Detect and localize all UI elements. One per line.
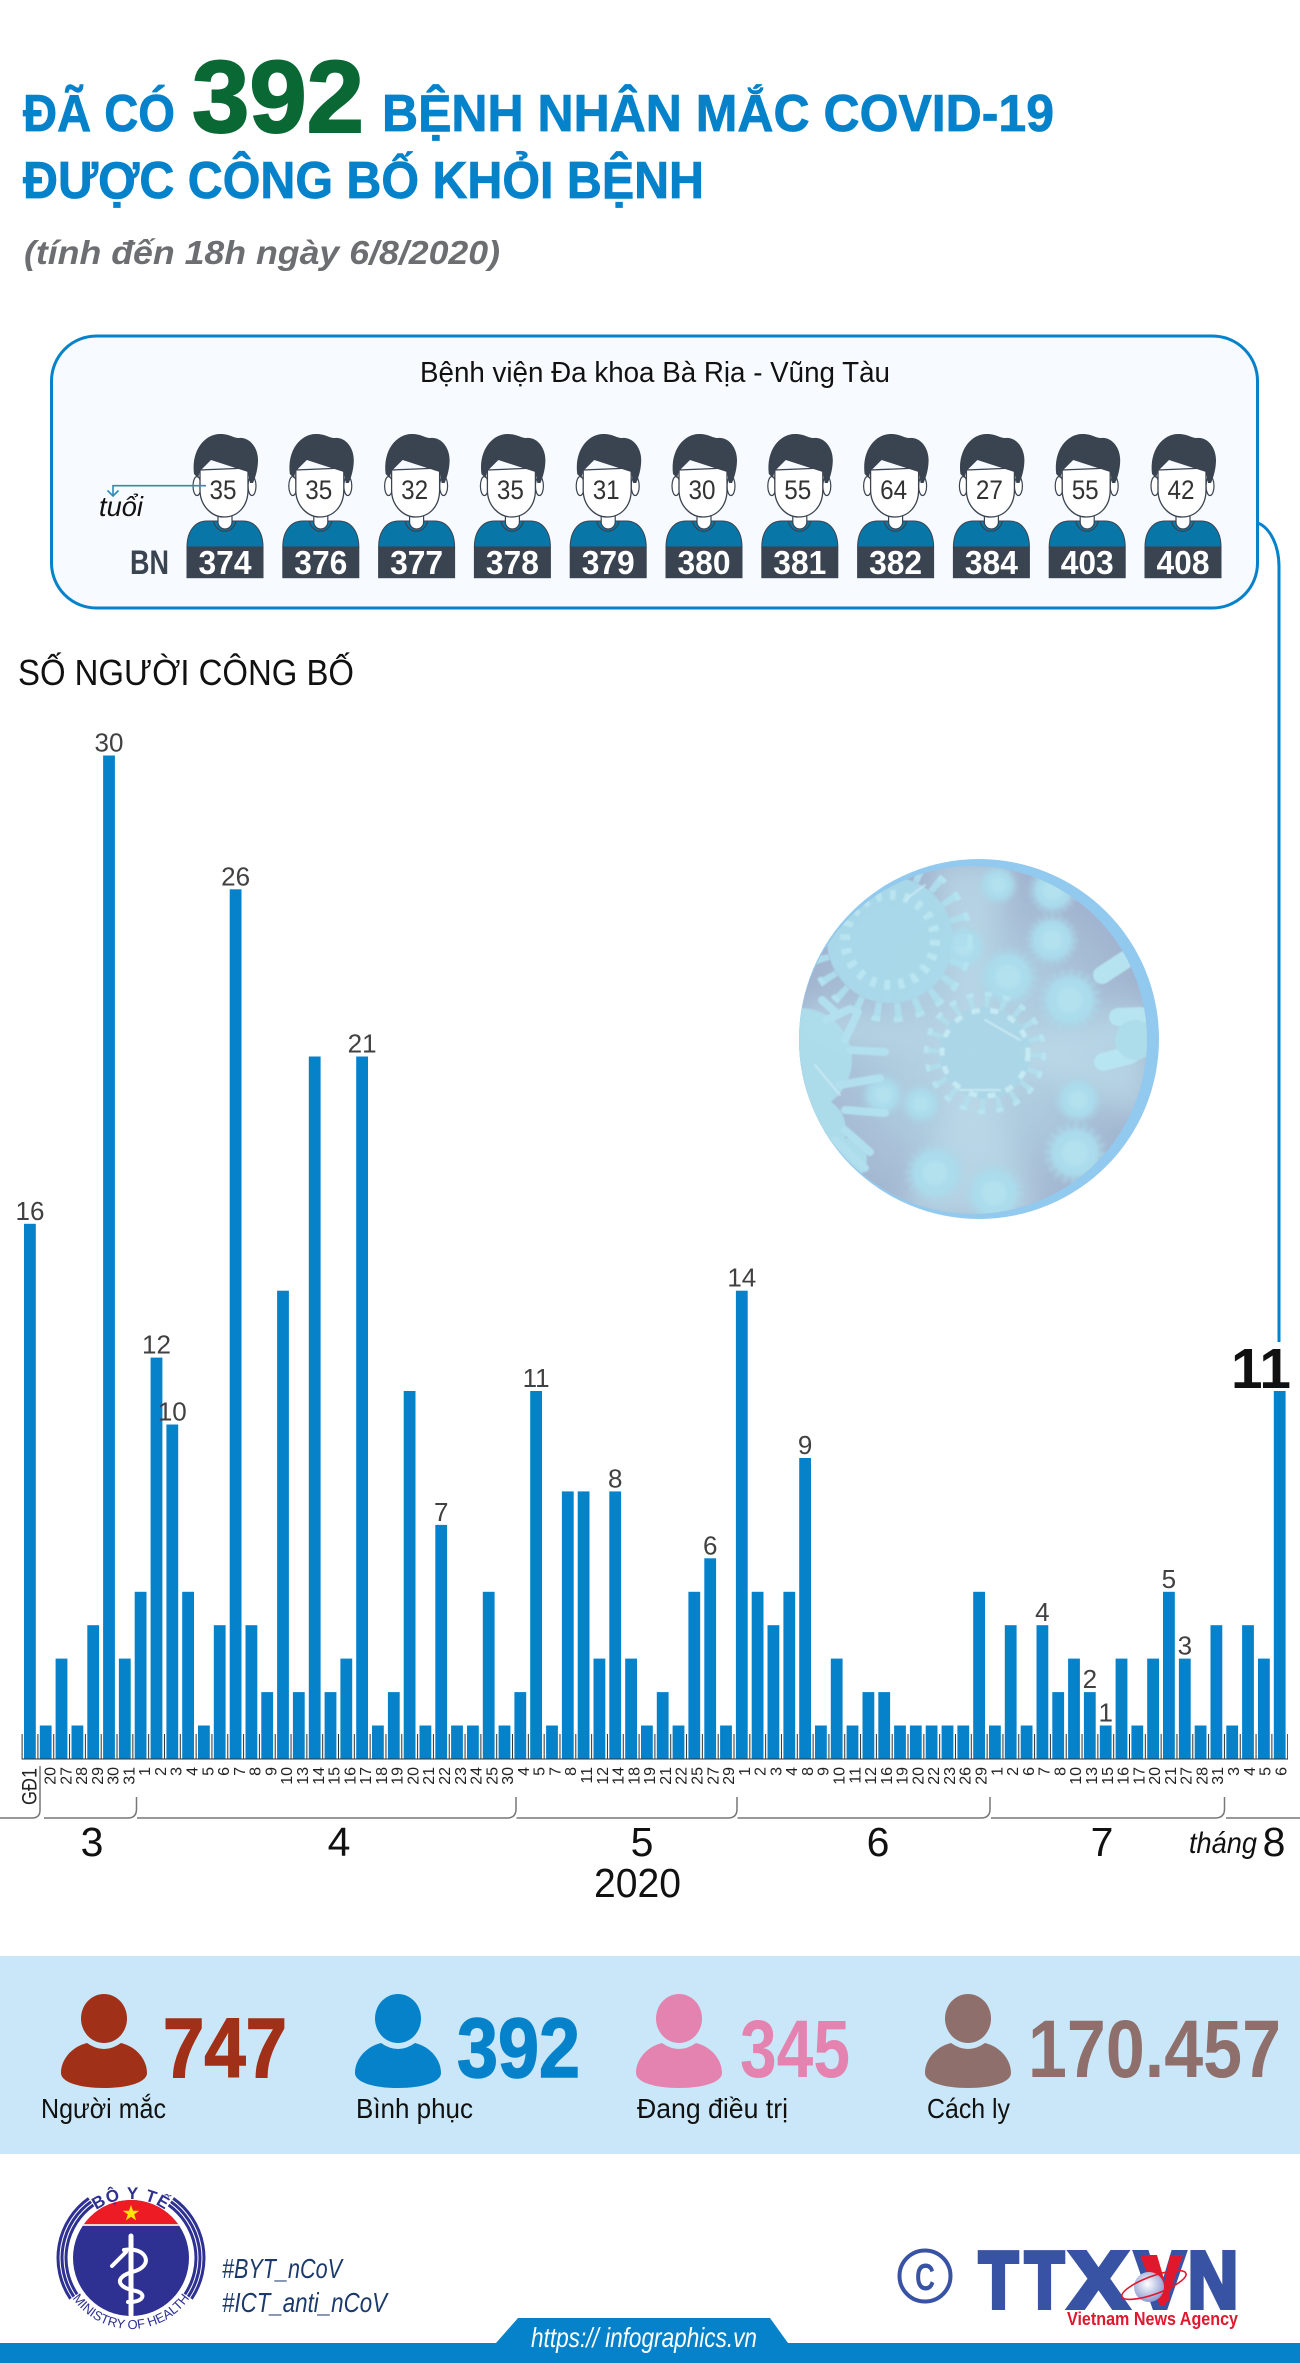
patient 408: 408 xyxy=(1156,544,1210,581)
date labels: 19 xyxy=(390,1767,407,1785)
date labels: 8 xyxy=(248,1767,265,1776)
date labels: 3 xyxy=(169,1767,186,1776)
patient 374: 35 xyxy=(210,475,236,505)
copyright mark xyxy=(900,2250,950,2302)
date labels: 22 xyxy=(437,1767,454,1785)
date labels: 11 xyxy=(847,1767,864,1784)
staff and snake xyxy=(112,2236,146,2315)
date labels: 7 xyxy=(548,1767,564,1776)
globe orbit xyxy=(1119,2265,1189,2305)
label: tuổi: tuổi xyxy=(99,491,144,522)
date labels: 7 xyxy=(1037,1767,1054,1776)
date labels: 15 xyxy=(326,1767,344,1785)
patient 382: 382 xyxy=(869,544,922,581)
date labels: 11 xyxy=(579,1767,596,1784)
illustration: coronavirus circle xyxy=(799,859,1159,1219)
date labels: 1 xyxy=(737,1767,754,1776)
date labels: 22 xyxy=(926,1767,943,1785)
patient 384 xyxy=(953,434,1030,581)
bar value labels: 7 xyxy=(434,1497,448,1527)
patient 380 xyxy=(666,434,742,581)
stat: bình phục: 392 xyxy=(457,2001,580,2095)
date labels: 23 xyxy=(942,1767,959,1785)
date labels: 6 xyxy=(1021,1767,1038,1776)
month brackets xyxy=(0,1766,1300,1818)
date labels: 27 xyxy=(705,1767,722,1785)
side arcs xyxy=(58,2198,204,2299)
date labels: 3 xyxy=(768,1767,785,1776)
date labels: 7 xyxy=(232,1767,249,1776)
band background xyxy=(0,1956,1300,2154)
date labels: 4 xyxy=(184,1767,202,1776)
axis line and ticks xyxy=(22,1758,1288,1760)
patient 403: 403 xyxy=(1061,544,1114,581)
date labels: 16 xyxy=(1116,1767,1132,1785)
bar value labels: 16 xyxy=(16,1196,44,1226)
date labels: 10 xyxy=(279,1767,296,1785)
patient 384: 27 xyxy=(976,475,1003,505)
date labels: 21 xyxy=(421,1767,438,1785)
bar value labels: 26 xyxy=(221,861,250,891)
patient 378: 378 xyxy=(486,544,539,581)
bar value labels: 12 xyxy=(142,1330,171,1360)
bar value labels: 8 xyxy=(608,1463,622,1493)
patient 384: 384 xyxy=(965,544,1019,581)
connector line from card to last bar xyxy=(1258,523,1279,1342)
patient 381: 381 xyxy=(773,544,826,581)
date labels: 27 xyxy=(58,1767,75,1785)
stat: đang điều trị: Đang điều trị xyxy=(637,2093,788,2124)
date labels: 10 xyxy=(1068,1767,1085,1785)
star xyxy=(123,2205,139,2220)
date labels: 29 xyxy=(974,1767,990,1785)
date labels: 19 xyxy=(895,1767,912,1785)
patient 403: 55 xyxy=(1072,475,1099,505)
date labels: 1 xyxy=(989,1767,1006,1776)
date labels: 17 xyxy=(358,1767,375,1785)
date labels: 3 xyxy=(1226,1767,1243,1776)
patient 408 xyxy=(1144,434,1222,581)
date labels: 16 xyxy=(879,1767,896,1785)
date labels: 20 xyxy=(910,1767,927,1785)
logo circle xyxy=(73,2200,189,2316)
stat: người mắc: 747 xyxy=(163,2001,287,2095)
date labels: 28 xyxy=(1194,1767,1211,1785)
date labels: 4 xyxy=(1242,1767,1259,1776)
latest value highlight: 11 xyxy=(1231,1337,1291,1401)
stat: cách ly: Cách ly xyxy=(927,2093,1010,2124)
bar value labels: 6 xyxy=(703,1530,717,1560)
date labels: 19 xyxy=(642,1767,659,1785)
date labels: 5 xyxy=(1258,1767,1275,1776)
date labels: 24 xyxy=(469,1767,486,1785)
bar value labels: 9 xyxy=(798,1430,812,1460)
patient 382 xyxy=(857,434,934,581)
bars xyxy=(24,756,1286,1759)
title line 2: ĐƯỢC CÔNG BỐ KHỎI BỆNH xyxy=(23,151,704,210)
date labels: 9 xyxy=(816,1767,833,1776)
footer bar xyxy=(0,2343,1300,2363)
date labels: 12 xyxy=(863,1767,880,1785)
date labels: 13 xyxy=(1084,1767,1101,1785)
patient 374: 374 xyxy=(198,544,252,581)
date labels: 5 xyxy=(532,1767,549,1776)
date labels: 20 xyxy=(1147,1767,1164,1785)
agency name: Vietnam News Agency xyxy=(1067,2309,1238,2329)
date labels: 18 xyxy=(374,1767,391,1785)
subtitle date: (tính đến 18h ngày 6/8/2020) xyxy=(24,234,500,271)
date labels: 15 xyxy=(1100,1767,1117,1785)
patient 378: 35 xyxy=(497,475,524,505)
date labels: 5 xyxy=(200,1767,217,1776)
stat: bình phục xyxy=(355,1994,580,2124)
bar value labels: 21 xyxy=(348,1028,377,1058)
virus image xyxy=(799,866,1147,1214)
label: BN: BN xyxy=(130,544,169,582)
title line 1 lead: ĐÃ CÓ xyxy=(23,84,175,143)
date labels: 20 xyxy=(405,1767,422,1785)
date labels: 4 xyxy=(516,1767,533,1776)
bar value labels: 10 xyxy=(158,1396,187,1426)
month labels: 3 xyxy=(81,1819,103,1865)
logo: TTXVN xyxy=(900,2236,1238,2329)
patient 380: 380 xyxy=(678,544,730,581)
circle rim xyxy=(799,859,1159,1219)
date labels: 12 xyxy=(595,1767,612,1785)
patient 377: 377 xyxy=(390,544,443,581)
date labels: 30 xyxy=(106,1767,123,1785)
hashtag 1: #BYT_nCoV xyxy=(222,2253,344,2284)
date labels: 21 xyxy=(1163,1767,1180,1785)
stat: người mắc xyxy=(41,1994,287,2124)
title line 1 tail: BỆNH NHÂN MẮC COVID-19 xyxy=(382,84,1054,143)
date labels: 26 xyxy=(958,1767,975,1785)
stat: bình phục: Bình phục xyxy=(356,2093,473,2124)
wordmark xyxy=(979,2236,1238,2324)
patient 380: 30 xyxy=(688,475,716,505)
bar value labels: 1 xyxy=(1098,1698,1113,1728)
hospital name: Bệnh viện Đa khoa Bà Rịa - Vũng Tàu xyxy=(420,357,890,389)
bar value labels: 4 xyxy=(1035,1597,1050,1627)
title xyxy=(23,40,1054,210)
date labels: 4 xyxy=(784,1767,801,1776)
bar value labels xyxy=(16,728,1192,1728)
bar value labels: 5 xyxy=(1162,1564,1176,1594)
patient 408: 42 xyxy=(1168,475,1194,505)
date labels: 2 xyxy=(153,1767,170,1776)
date labels: 30 xyxy=(500,1767,517,1785)
wordmark: T xyxy=(979,2236,1018,2324)
date labels: 21 xyxy=(658,1767,675,1785)
date labels: 6 xyxy=(216,1767,233,1776)
panel: hospital patients card xyxy=(52,336,1258,608)
website url: https:// infographics.vn xyxy=(531,2322,757,2353)
patient 377 xyxy=(378,434,455,581)
bar value labels: 14 xyxy=(727,1263,756,1293)
date labels: 25 xyxy=(690,1767,706,1785)
red cap xyxy=(82,2200,180,2226)
bar chart: patients announced per day xyxy=(0,728,1300,1906)
date labels: 29 xyxy=(90,1767,107,1785)
wordmark: X xyxy=(1069,2236,1128,2324)
date labels: 31 xyxy=(121,1767,138,1785)
date labels: GĐ1 xyxy=(18,1768,42,1805)
copyright letter: C xyxy=(915,2257,935,2299)
patient 376: 376 xyxy=(294,544,347,581)
patient 376 xyxy=(282,434,359,581)
hashtag 2: #ICT_anti_nCoV xyxy=(222,2287,389,2318)
bar value labels: 30 xyxy=(95,728,123,758)
patient 379: 31 xyxy=(593,475,620,505)
patient 376: 35 xyxy=(305,475,332,505)
patient 403 xyxy=(1049,434,1126,581)
card background xyxy=(52,336,1258,608)
month labels xyxy=(81,1819,1285,1865)
patient 378 xyxy=(474,434,551,581)
date labels xyxy=(18,1767,1290,1805)
month labels: 7 xyxy=(1091,1819,1113,1865)
month labels: 4 xyxy=(328,1819,350,1865)
logo top text: BỘ Y TẾ xyxy=(91,2186,172,2210)
bar value labels: 3 xyxy=(1178,1631,1192,1661)
date labels: 10 xyxy=(832,1767,848,1785)
bar value labels: 11 xyxy=(523,1363,550,1393)
logo: Ministry of Health xyxy=(56,2186,206,2330)
date labels: 14 xyxy=(611,1767,628,1785)
footer tab xyxy=(496,2318,788,2343)
hashtags xyxy=(222,2253,389,2318)
date labels: 2 xyxy=(1005,1767,1022,1776)
date labels: 29 xyxy=(721,1767,738,1785)
patient 381: 55 xyxy=(784,475,811,505)
date labels: 8 xyxy=(1052,1767,1069,1776)
date labels: 14 xyxy=(311,1767,328,1785)
highlighted number 392: 392 xyxy=(192,40,364,154)
stat: đang điều trị: 345 xyxy=(740,2004,850,2095)
date labels: 20 xyxy=(42,1767,60,1785)
date labels: 8 xyxy=(563,1767,580,1776)
date labels: 13 xyxy=(295,1767,312,1785)
patient 379: 379 xyxy=(582,544,635,581)
date labels: 18 xyxy=(626,1767,643,1785)
chart heading: SỐ NGƯỜI CÔNG BỐ xyxy=(18,651,354,693)
date labels: 17 xyxy=(1131,1767,1148,1785)
stat: người mắc: Người mắc xyxy=(41,2093,166,2124)
date labels: 25 xyxy=(484,1767,501,1785)
date labels: 16 xyxy=(342,1767,359,1785)
date labels: 9 xyxy=(263,1767,280,1776)
label: tháng: tháng xyxy=(1189,1827,1257,1860)
date labels: 28 xyxy=(74,1767,91,1785)
wordmark: V xyxy=(1135,2236,1185,2324)
patient 379 xyxy=(570,434,647,581)
logo bottom text: MINISTRY OF HEALTH xyxy=(73,2294,189,2330)
date labels: 27 xyxy=(1179,1767,1196,1785)
bar value labels: 2 xyxy=(1083,1664,1097,1694)
wordmark: T xyxy=(1025,2236,1064,2324)
date labels: 31 xyxy=(1210,1767,1227,1785)
patient 377: 32 xyxy=(401,475,428,505)
month labels: 6 xyxy=(867,1819,889,1865)
panel: totals band xyxy=(0,1956,1300,2154)
date labels: 6 xyxy=(1273,1767,1290,1776)
month labels: 8 xyxy=(1263,1819,1285,1865)
red stroke of V xyxy=(1140,2255,1183,2306)
date labels: 8 xyxy=(800,1767,817,1776)
wordmark: N xyxy=(1188,2236,1238,2324)
globe xyxy=(1134,2272,1164,2302)
patient 374 xyxy=(186,434,264,581)
patient 382: 64 xyxy=(880,475,907,505)
stat: cách ly xyxy=(925,1994,1281,2124)
arrow: age pointer xyxy=(108,486,206,496)
stat: đang điều trị xyxy=(636,1994,850,2124)
patient 381 xyxy=(761,434,838,581)
date labels: 1 xyxy=(137,1767,154,1776)
month labels: 5 xyxy=(631,1819,653,1865)
date labels: 2 xyxy=(753,1767,770,1776)
year label: 2020 xyxy=(594,1860,681,1906)
date labels: 22 xyxy=(674,1767,691,1785)
date labels: 23 xyxy=(453,1767,470,1785)
